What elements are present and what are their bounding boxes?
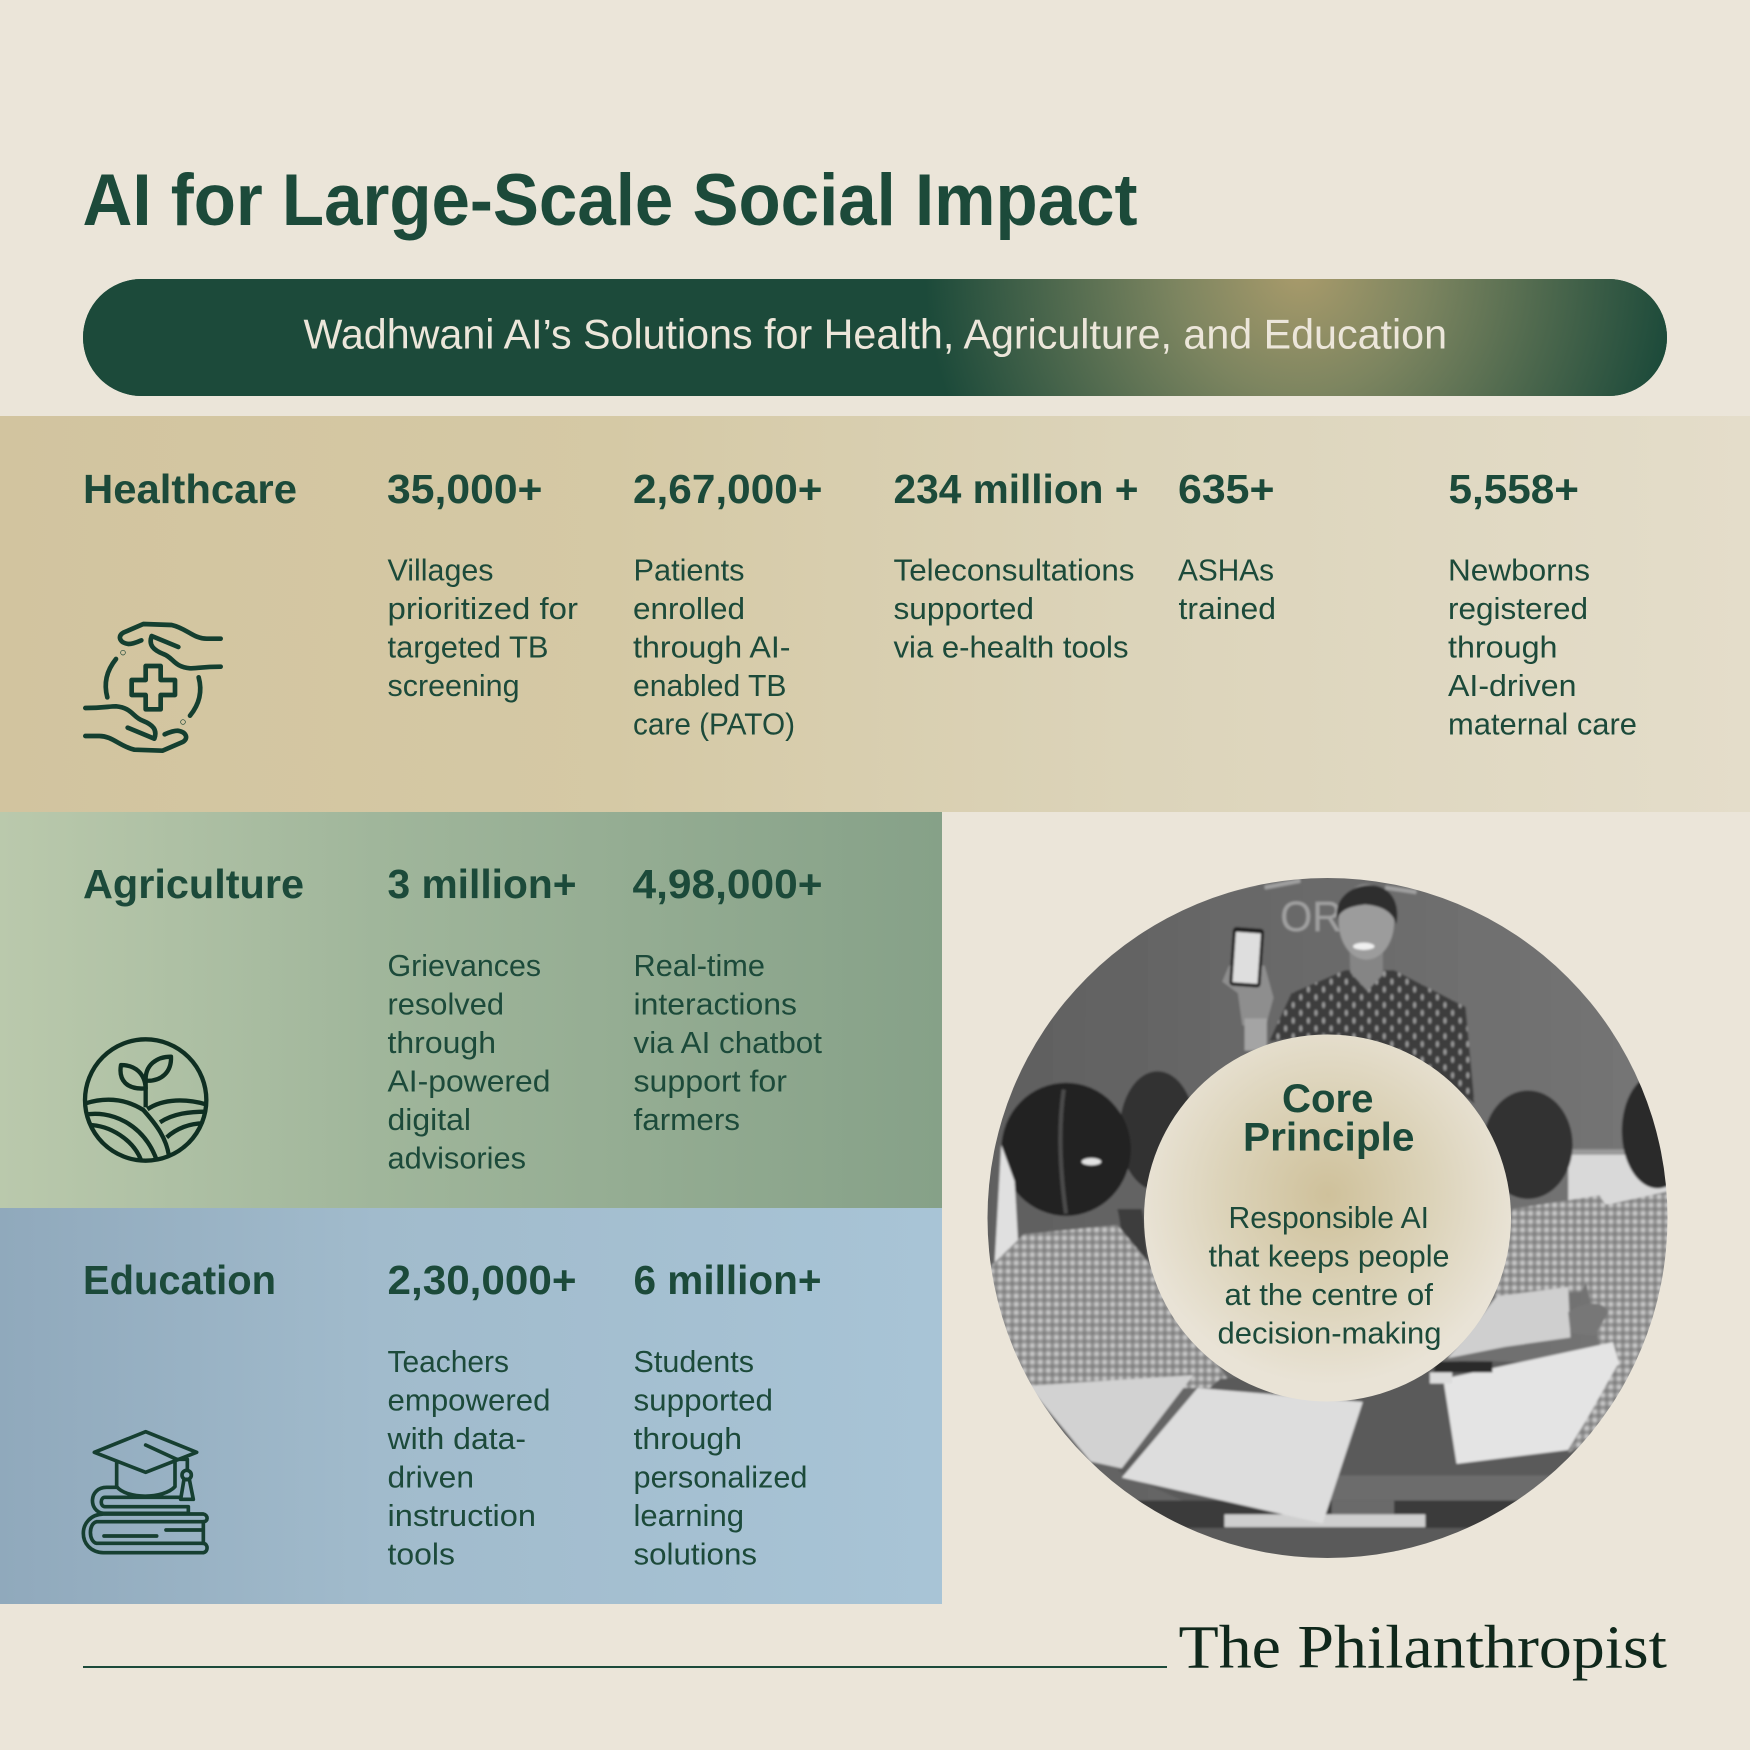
core principle circle <box>1144 1034 1511 1402</box>
icon: plant and fields <box>83 1039 208 1161</box>
stat: grievances: AI-powered <box>388 1064 550 1098</box>
stat: patients: enrolled <box>633 592 745 626</box>
stat: villages: screening <box>388 669 520 703</box>
stat: students: solutions <box>634 1538 757 1572</box>
stat: newborns: registered <box>1448 592 1588 626</box>
healthcare heading: Healthcare <box>83 466 297 512</box>
stat: students: Students <box>634 1345 754 1379</box>
stat: students: through <box>634 1422 742 1456</box>
stat: teachers: with data- <box>386 1422 526 1456</box>
stat: teleconsultations: Teleconsultations <box>894 554 1134 588</box>
stat: patients: 2,67,000+ <box>633 466 822 512</box>
stat: students: supported <box>634 1384 773 1418</box>
stat: grievances: digital <box>388 1103 471 1137</box>
title: AI for Large-Scale Social Impact <box>82 160 1138 241</box>
stat: teachers: empowered <box>388 1384 550 1418</box>
stat: grievances: Grievances <box>388 949 541 983</box>
stat: chatbot interactions: Real-time <box>634 949 765 983</box>
core principle circle: Core <box>1282 1077 1374 1121</box>
circular classroom photo <box>988 878 1668 1558</box>
board ledge <box>1568 1154 1675 1204</box>
stat: teleconsultations <box>894 466 1138 664</box>
stat: newborns <box>1448 466 1637 742</box>
stat: teleconsultations: via e-health tools <box>894 630 1128 664</box>
stat: patients: Patients <box>634 554 744 588</box>
core principle circle: Principle <box>1243 1116 1414 1160</box>
stat: grievances: advisories <box>388 1142 526 1176</box>
core principle circle: that keeps people <box>1208 1240 1450 1274</box>
stat: teachers <box>386 1257 576 1572</box>
stat: ASHAs <box>1178 466 1276 626</box>
stat: ASHAs: 635+ <box>1178 466 1274 512</box>
stat: students: 6 million+ <box>634 1257 822 1303</box>
stat: students <box>634 1257 822 1572</box>
stat: teachers: Teachers <box>388 1345 509 1379</box>
stat: ASHAs: ASHAs <box>1178 554 1274 588</box>
subtitle pill banner: Wadhwani AI’s Solutions for Health, Agriculture, and Education <box>304 310 1447 358</box>
stat: patients: enabled TB <box>633 669 786 703</box>
stat: grievances: through <box>388 1026 496 1060</box>
icon: graduation cap on books <box>83 1432 207 1553</box>
icon: hands holding medical cross <box>85 624 221 751</box>
stat: villages: Villages <box>388 554 494 588</box>
stat: teachers: 2,30,000+ <box>388 1257 576 1303</box>
core principle circle: at the centre of <box>1224 1278 1434 1312</box>
stat: teachers: tools <box>388 1538 455 1572</box>
education heading: Education <box>83 1257 276 1303</box>
core principle circle: decision-making <box>1218 1316 1442 1350</box>
stat: students: personalized <box>634 1460 808 1494</box>
desk <box>1121 1361 1576 1500</box>
stat: chatbot interactions: farmers <box>634 1103 740 1137</box>
stat: grievances <box>388 861 576 1176</box>
stat: newborns: maternal care <box>1448 708 1637 742</box>
panel: agriculture <box>0 812 942 1208</box>
open books <box>1028 1375 1193 1468</box>
stat: patients: care (PATO) <box>633 708 795 742</box>
stat: newborns: AI-driven <box>1448 669 1576 703</box>
stat: grievances: 3 million+ <box>388 861 576 907</box>
stat: chatbot interactions: via AI chatbot <box>634 1026 823 1060</box>
left students <box>1120 1071 1195 1191</box>
stat: villages: prioritized for <box>388 592 578 626</box>
stat: patients: through AI- <box>633 630 790 664</box>
stat: villages: targeted TB <box>388 630 548 664</box>
panel: healthcare <box>0 416 1750 812</box>
stat: villages <box>387 466 578 703</box>
panel: education <box>0 1208 942 1604</box>
chalk writing: OR <box>1280 893 1342 940</box>
stat: chatbot interactions <box>632 861 823 1137</box>
stat: chatbot interactions: support for <box>634 1064 787 1098</box>
stat: chatbot interactions: interactions <box>634 988 797 1022</box>
stat: chatbot interactions: 4,98,000+ <box>632 861 822 907</box>
stat: ASHAs: trained <box>1178 592 1276 626</box>
stat: teleconsultations: supported <box>894 592 1034 626</box>
stat: teachers: instruction <box>388 1499 536 1533</box>
stat: grievances: resolved <box>388 988 504 1022</box>
stat: newborns: Newborns <box>1448 554 1590 588</box>
stat: teleconsultations: 234 million + <box>894 466 1138 512</box>
stat: villages: 35,000+ <box>387 466 542 512</box>
right students <box>1483 1091 1573 1199</box>
stat: newborns: through <box>1448 630 1558 664</box>
teacher <box>1269 970 1474 1103</box>
stat: patients <box>633 466 822 742</box>
stat: teachers: driven <box>388 1460 474 1494</box>
stat: newborns: 5,558+ <box>1448 466 1579 512</box>
footer rule and logo wordmark: The Philanthropist <box>1178 1614 1667 1682</box>
core principle circle: Responsible AI <box>1228 1201 1429 1235</box>
subtitle pill banner <box>83 279 1667 396</box>
agriculture heading: Agriculture <box>83 861 304 907</box>
stat: students: learning <box>634 1499 744 1533</box>
